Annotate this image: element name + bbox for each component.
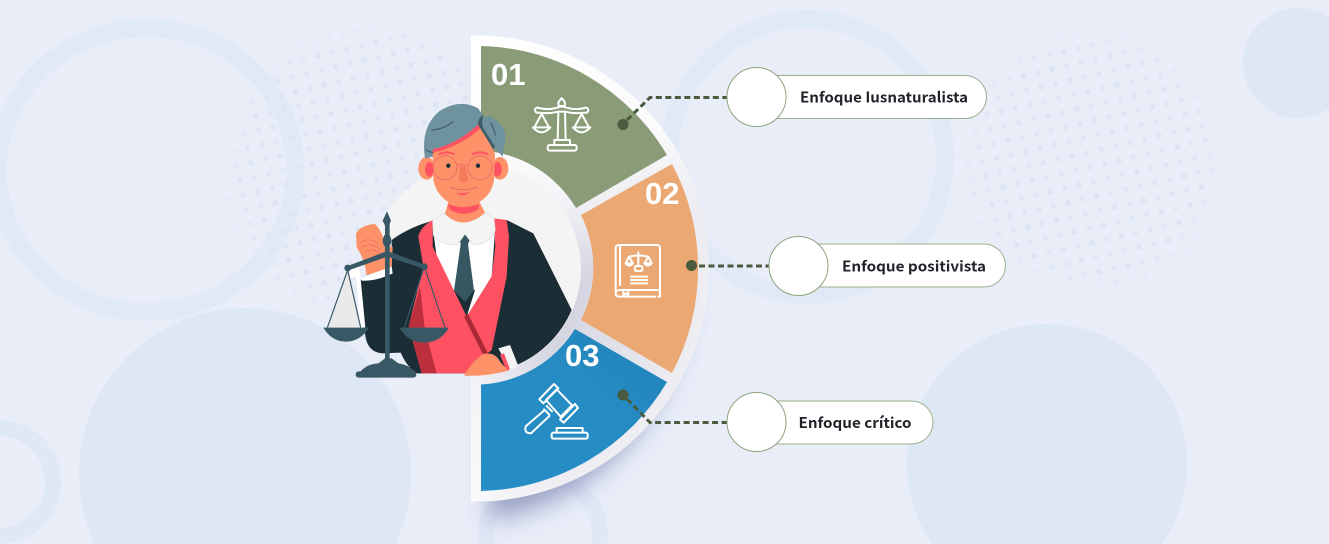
hand holding scales xyxy=(356,224,393,275)
connector 1 xyxy=(618,98,727,130)
label: Enfoque positivista xyxy=(769,236,1006,296)
inner circle xyxy=(371,164,581,374)
segment shape: green xyxy=(481,46,667,208)
number 01: 01 xyxy=(491,57,525,92)
robe xyxy=(360,220,572,373)
label: Enfoque Iusnaturalista xyxy=(727,68,986,126)
icon: scales of justice xyxy=(533,98,590,151)
icon: law book xyxy=(616,245,660,297)
sleeve cuff xyxy=(349,265,393,327)
illustration: judge holding scales xyxy=(323,104,572,378)
nose xyxy=(459,166,468,183)
icon: gavel xyxy=(525,384,588,439)
circle: large lower left xyxy=(79,308,411,544)
halftone dots: right xyxy=(976,44,1207,274)
label: Enfoque Iusnaturalista: Enfoque Iusnaturalista xyxy=(800,86,968,108)
number 03: 03 xyxy=(565,338,599,373)
segment 01 xyxy=(481,46,667,208)
eyes xyxy=(446,163,480,168)
ears xyxy=(418,157,508,180)
segment 02 xyxy=(581,164,698,373)
segment shape: blue xyxy=(481,329,667,491)
base xyxy=(356,358,416,378)
circle: top right xyxy=(1243,8,1329,118)
ring: upper left xyxy=(0,28,296,312)
circle: large lower right xyxy=(907,324,1187,544)
neck xyxy=(445,202,485,223)
glasses xyxy=(433,156,492,180)
label: Enfoque crítico: Enfoque crítico xyxy=(798,412,912,433)
neck shadow xyxy=(448,204,479,214)
number 02: 02 xyxy=(645,176,679,211)
label: Enfoque positivista: Enfoque positivista xyxy=(842,256,986,276)
right hand and scroll xyxy=(464,345,518,376)
ring: bottom centre xyxy=(486,478,600,544)
label: Enfoque crítico xyxy=(727,392,933,452)
sash xyxy=(409,218,509,373)
left pan xyxy=(323,270,369,342)
shirt xyxy=(433,227,495,317)
connector 3 xyxy=(618,390,727,422)
collar xyxy=(433,213,495,245)
face xyxy=(433,123,495,207)
mouth xyxy=(450,187,477,195)
ring: lower left xyxy=(0,428,53,536)
post and beam xyxy=(344,211,428,362)
segment shape: orange xyxy=(581,164,698,373)
tie xyxy=(454,232,474,302)
connector 2 xyxy=(686,260,769,271)
semicircle frame xyxy=(471,35,709,502)
right pan xyxy=(399,267,449,343)
halftone dots: left xyxy=(239,40,467,286)
segment 03 xyxy=(481,329,667,491)
ring: behind connectors xyxy=(669,19,945,295)
hair xyxy=(424,104,505,158)
tie shadow xyxy=(453,290,475,317)
eyebrows xyxy=(439,152,487,154)
balance scales xyxy=(323,211,449,378)
semicircle shadow xyxy=(490,60,686,520)
